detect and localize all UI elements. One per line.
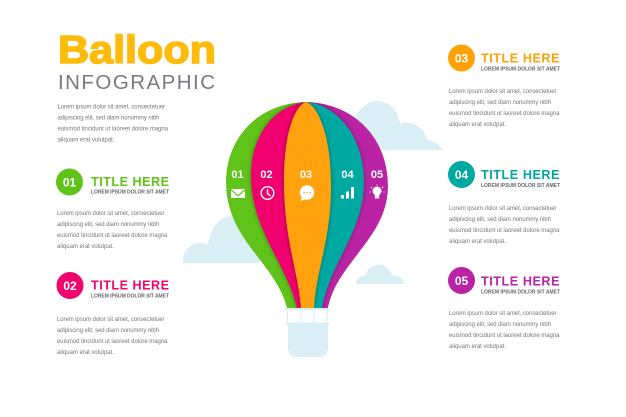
badge 02: 02 bbox=[63, 279, 77, 293]
body 05 bbox=[449, 311, 560, 350]
segment 04 teal bbox=[306, 102, 364, 308]
title bbox=[58, 29, 216, 94]
body 02: Lorem ipsum dolor sit amet, consectetuer bbox=[57, 317, 164, 323]
icon: light bulb bbox=[370, 184, 384, 198]
body 04: adipiscing elit, sed diam nonummy nibh bbox=[449, 217, 551, 223]
subheading 04: LOREM IPSUM DOLOR SIT AMET bbox=[481, 183, 560, 189]
body 03: adipiscing elit, sed diam nonummy nibh bbox=[449, 100, 551, 106]
body 03: aliquam erat volutpat. bbox=[449, 122, 506, 128]
intro text: adipiscing elit, sed diam nonummy nibh bbox=[58, 116, 160, 122]
section 01 bbox=[56, 168, 169, 250]
balloon envelope bbox=[226, 102, 388, 308]
icon: speech bubble bbox=[300, 185, 314, 201]
body 05: adipiscing elit, sed diam nonummy nibh bbox=[449, 322, 551, 328]
segment 03 orange bbox=[284, 102, 331, 308]
badge 04: 04 bbox=[455, 168, 468, 182]
body 02 bbox=[57, 317, 168, 356]
body 02: aliquam erat volutpat. bbox=[57, 350, 114, 356]
body 02: adipiscing elit, sed diam nonummy nibh bbox=[57, 328, 159, 334]
icon: clock bbox=[261, 187, 274, 199]
segment 01 green bbox=[226, 102, 306, 308]
badge 03: 03 bbox=[455, 52, 468, 66]
balloon numbers bbox=[231, 169, 383, 181]
badge 05: 05 bbox=[455, 274, 468, 288]
balloon numbers: 02 bbox=[260, 169, 273, 181]
balloon numbers: 04 bbox=[341, 169, 354, 181]
icon: envelope bbox=[231, 189, 245, 198]
section 05 bbox=[448, 267, 560, 350]
body 01: euismod tincidunt ut laoreet dolore magna bbox=[57, 233, 168, 239]
balloon numbers: 01 bbox=[231, 169, 244, 181]
body 01: adipiscing elit, sed diam nonummy nibh bbox=[57, 222, 159, 228]
intro text: aliquam erat volutpat. bbox=[58, 138, 115, 144]
body 04: Lorem ipsum dolor sit amet, consectetuer bbox=[449, 206, 556, 212]
body 05: euismod tincidunt ut laoreet dolore magna bbox=[449, 333, 560, 339]
badge 01: 01 bbox=[63, 176, 76, 190]
body 03: Lorem ipsum dolor sit amet, consectetuer bbox=[449, 89, 556, 95]
title: INFOGRAPHIC bbox=[58, 71, 215, 94]
heading 02: TITLE HERE bbox=[91, 278, 169, 292]
cloud: small right bbox=[356, 265, 404, 284]
icon: bar chart bbox=[341, 187, 354, 198]
intro text bbox=[58, 104, 169, 144]
heading 04: TITLE HERE bbox=[481, 168, 560, 182]
body 05: Lorem ipsum dolor sit amet, consectetuer bbox=[449, 311, 556, 317]
balloon basket bbox=[285, 308, 329, 357]
section 04 bbox=[448, 161, 560, 245]
body 03: euismod tincidunt ut laoreet dolore magna bbox=[449, 111, 560, 117]
body 01: Lorem ipsum dolor sit amet, consectetuer bbox=[57, 211, 164, 217]
body 01: aliquam erat volutpat. bbox=[57, 244, 114, 250]
cloud: lower left bbox=[183, 216, 260, 263]
section 03 bbox=[448, 44, 560, 128]
body 01 bbox=[57, 211, 168, 250]
intro text: euismod tincidunt ut laoreet dolore magna bbox=[58, 126, 169, 132]
heading 05: TITLE HERE bbox=[481, 274, 560, 288]
subheading 05: LOREM IPSUM DOLOR SIT AMET bbox=[481, 290, 560, 296]
segment 02 pink bbox=[251, 102, 310, 308]
heading 01: TITLE HERE bbox=[91, 175, 169, 189]
balloon numbers: 05 bbox=[371, 169, 383, 181]
body 05: aliquam erat volutpat. bbox=[449, 344, 506, 350]
body 03 bbox=[449, 89, 560, 128]
section 02 bbox=[56, 272, 169, 356]
intro text: Lorem ipsum dolor sit amet, consectetuer bbox=[58, 104, 165, 110]
cloud: top right bbox=[350, 101, 443, 150]
body 04: euismod tincidunt ut laoreet dolore magna bbox=[449, 228, 560, 234]
segment 05 purple bbox=[306, 102, 388, 308]
subheading 01: LOREM IPSUM DOLOR SIT AMET bbox=[91, 190, 169, 196]
subheading 03: LOREM IPSUM DOLOR SIT AMET bbox=[481, 66, 560, 72]
body 02: euismod tincidunt ut laoreet dolore magna bbox=[57, 339, 168, 345]
subheading 02: LOREM IPSUM DOLOR SIT AMET bbox=[91, 294, 169, 300]
heading 03: TITLE HERE bbox=[481, 52, 560, 66]
title: Balloon bbox=[58, 29, 216, 72]
body 04: aliquam erat volutpat. bbox=[449, 239, 506, 245]
balloon numbers: 03 bbox=[300, 169, 312, 181]
body 04 bbox=[449, 206, 560, 245]
